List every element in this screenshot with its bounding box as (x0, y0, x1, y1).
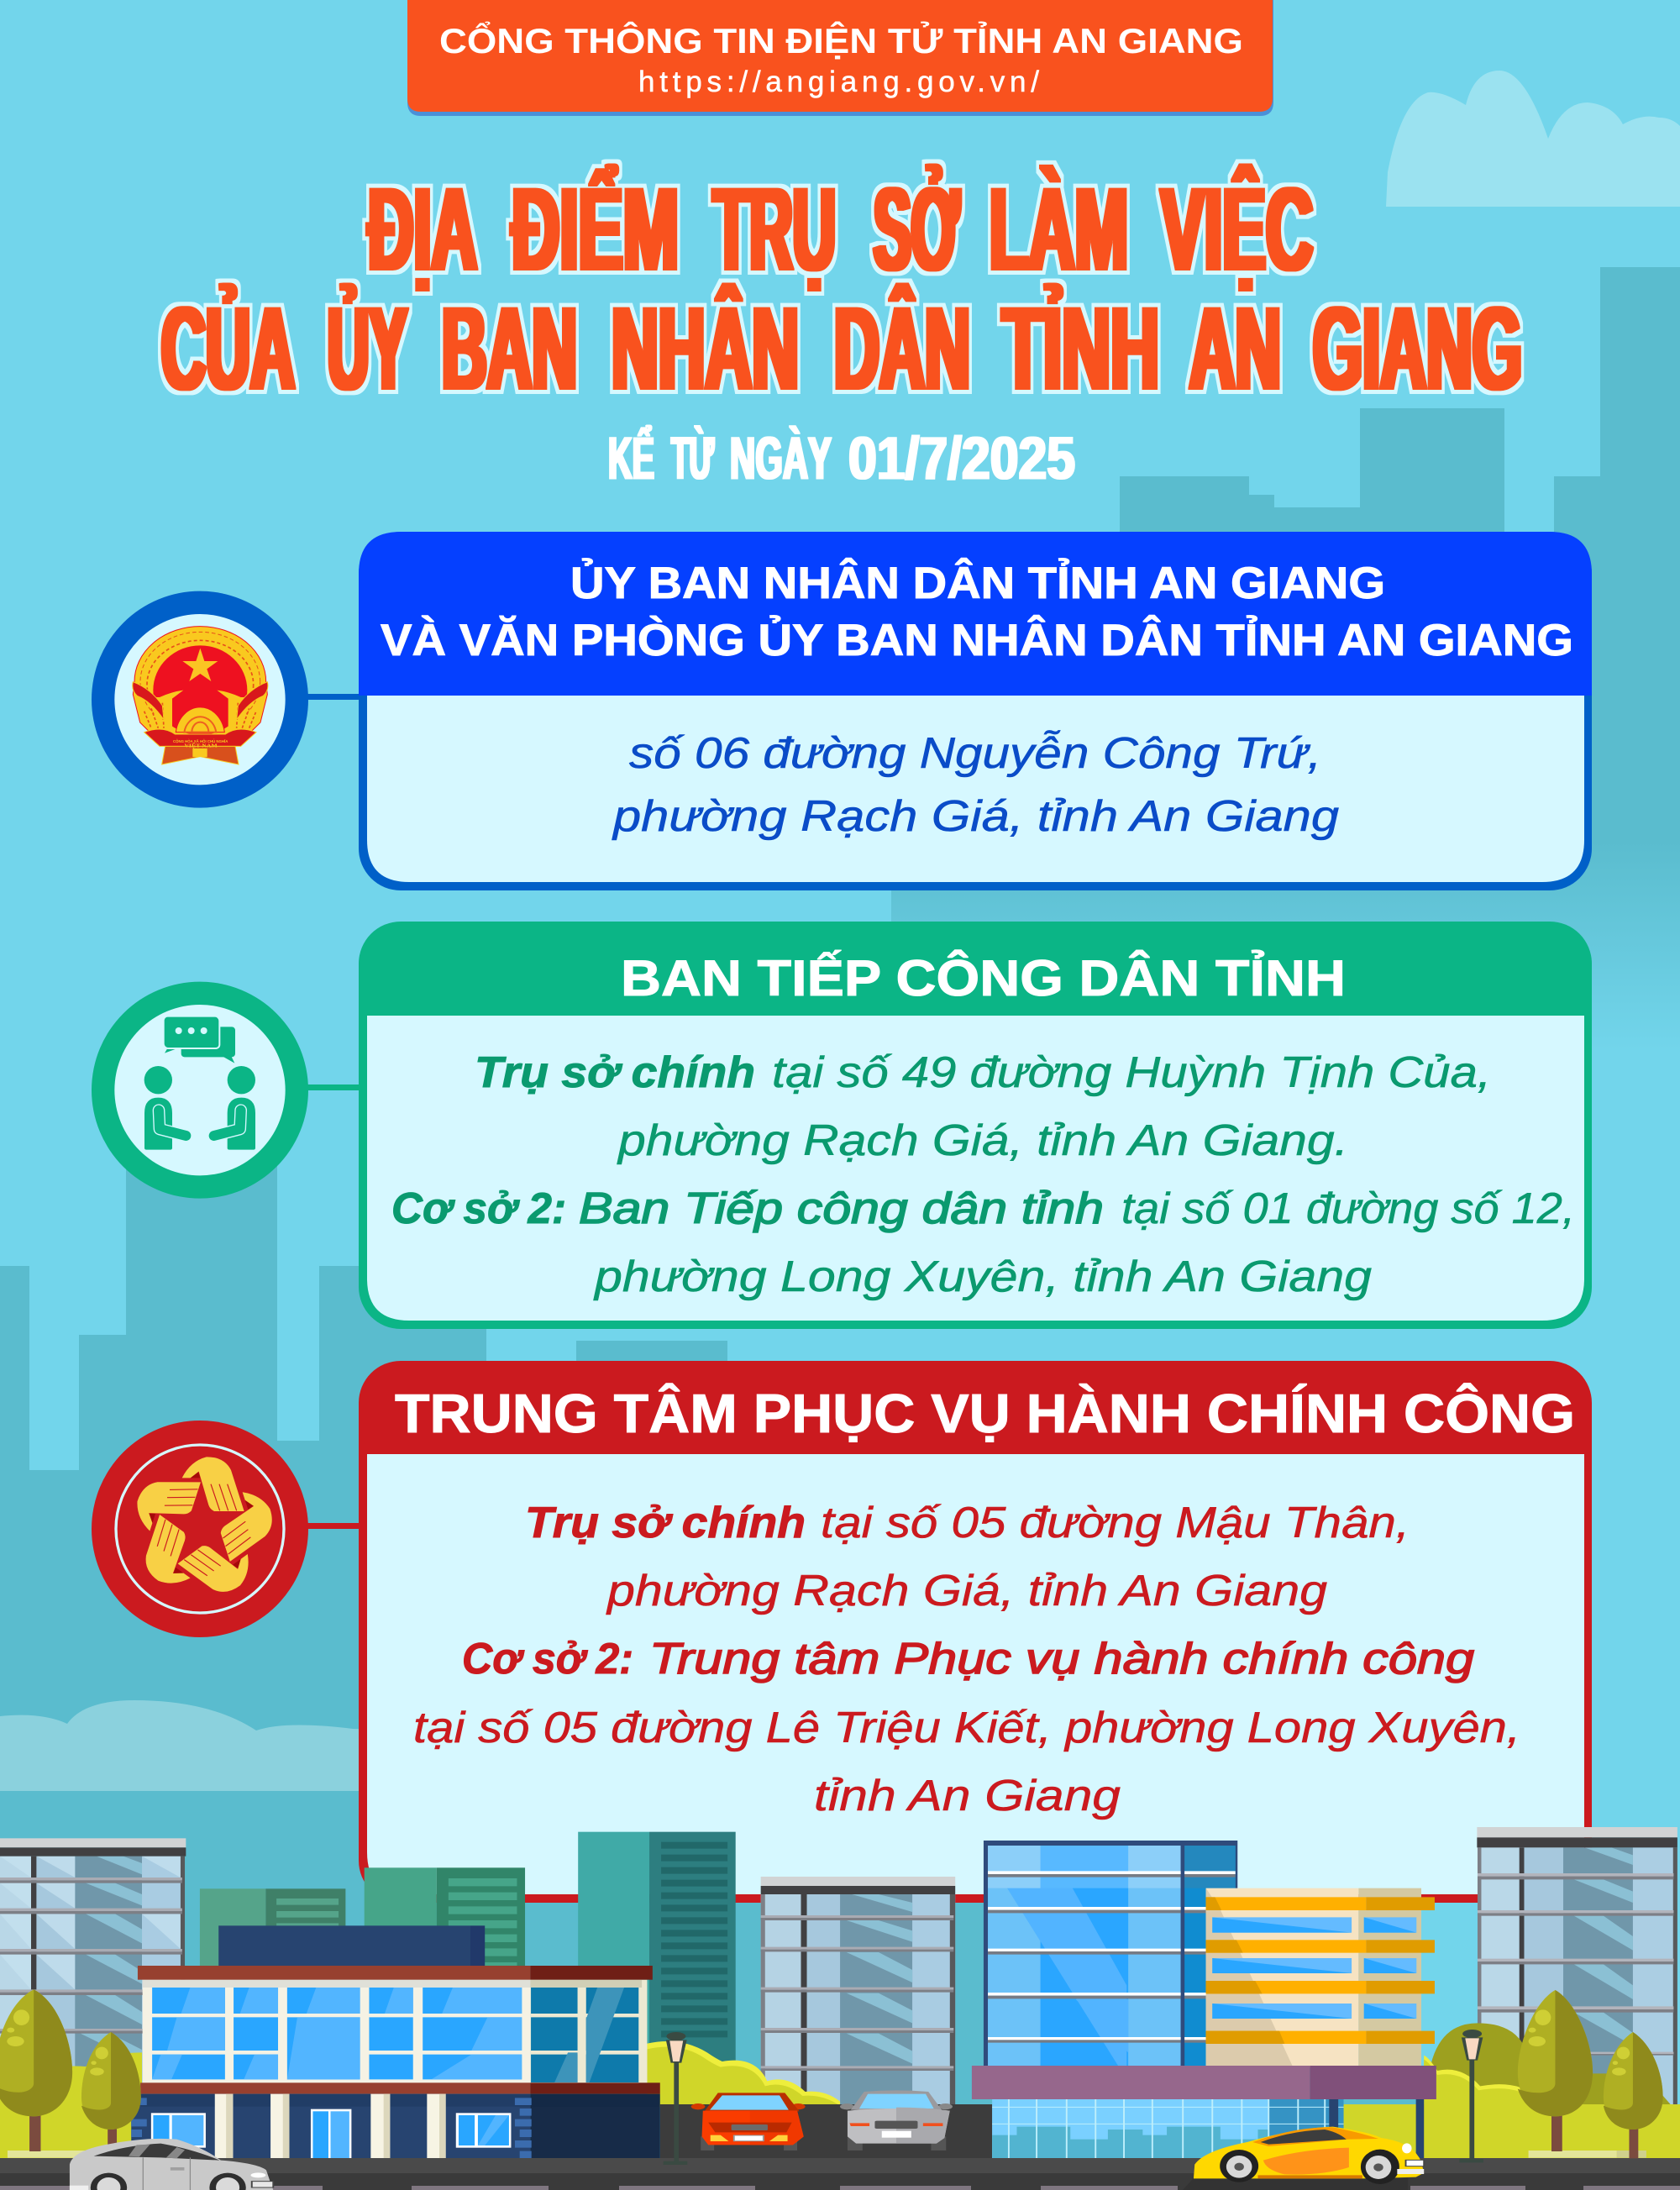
title: VIỆC (1161, 163, 1313, 295)
address: Ban Tiếp công dân: tại số 01 đường số 12, (1121, 1184, 1575, 1233)
address: Ban Tiếp công dân (391, 1048, 1575, 1301)
title: SỞ (874, 163, 959, 295)
trees left (0, 1989, 141, 2158)
building: cream tower with orange bands (1206, 1888, 1435, 2067)
icon: national emblem (92, 591, 308, 808)
address: Trung tâm: Trung tâm Phục vụ hành chính công (649, 1635, 1474, 1683)
emblem red disc (153, 645, 247, 735)
subtitle date: KỂ (608, 425, 654, 492)
address: Ban Tiếp công dân: tại số 49 đường Huỳnh Tịnh Của, (772, 1048, 1491, 1097)
icon: two people talking (92, 982, 308, 1199)
heading: Trung tâm: TRUNG TÂM PHỤC VỤ HÀNH CHÍNH CÔNG (395, 1383, 1575, 1444)
address: Ban Tiếp công dân: Cơ sở 2: (391, 1184, 566, 1233)
title: ỦY (328, 282, 407, 414)
background cloud left (0, 1700, 470, 1791)
address: Trung tâm: tại số 05 đường Lê Triệu Kiết, phường Long Xuyên, (413, 1704, 1520, 1752)
title: DÂN (834, 282, 970, 414)
red car (691, 2093, 806, 2151)
title: TRỤ (713, 163, 836, 295)
title: ĐỊA (368, 163, 477, 295)
icon: five hands star (92, 1421, 308, 1637)
background skyline right (891, 267, 1680, 1092)
address: UBND: phường Rạch Giá, tỉnh An Giang (612, 792, 1339, 841)
icon: national emblem: VIỆT NAM (184, 742, 218, 748)
address: UBND (612, 729, 1339, 841)
emblem lower wreath (151, 691, 249, 733)
building: green towers and teal tower (200, 1832, 736, 2070)
bush right (840, 2023, 1680, 2158)
building: right glass tower (1477, 1827, 1677, 2108)
trees right (1518, 1990, 1663, 2158)
speech bubbles (165, 1017, 235, 1063)
header banner: CỔNG THÔNG TIN ĐIỆN TỬ TỈNH AN GIANG (439, 19, 1243, 60)
emblem gear (176, 707, 224, 733)
city scene (0, 1827, 1680, 2190)
address: Ban Tiếp công dân: Ban Tiếp công dân tỉnh (579, 1184, 1104, 1233)
emblem ribbon and base (144, 729, 256, 746)
title: AN (1189, 282, 1281, 414)
title: BAN (442, 282, 577, 414)
title: ĐIỂM (512, 163, 679, 295)
title: NHÂN (612, 282, 799, 414)
building: glass lobby with purple band (972, 2066, 1436, 2158)
street lamp left (664, 2032, 687, 2165)
street lamp right (1459, 2030, 1483, 2162)
bush left (0, 2052, 142, 2158)
address: Trung tâm (413, 1499, 1520, 1820)
building: main office (131, 1925, 660, 2158)
address: Trung tâm: Cơ sở 2: (462, 1635, 633, 1683)
building: centre glass tower (761, 1877, 955, 2107)
background skyline left (0, 1159, 1421, 2190)
panel: UBND (359, 532, 1592, 890)
emblem wheat ring (133, 627, 267, 737)
person right (214, 1066, 255, 1150)
bush middle (647, 2041, 840, 2158)
address: Trung tâm: phường Rạch Giá, tỉnh An Giang (606, 1567, 1327, 1615)
building: left glass tower (0, 1838, 186, 2088)
address: Trung tâm: tỉnh An Giang (814, 1772, 1121, 1820)
heading: UBND: ỦY BAN NHÂN DÂN TỈNH AN GIANG (570, 557, 1385, 608)
title: TỈNH (1002, 282, 1159, 414)
heading: UBND (381, 557, 1573, 665)
heading: Ban Tiếp công dân: BAN TIẾP CÔNG DÂN TỈNH (621, 950, 1346, 1006)
emblem star (182, 649, 218, 681)
address: UBND: số 06 đường Nguyễn Công Trứ, (629, 729, 1321, 778)
address: Ban Tiếp công dân: phường Long Xuyên, tỉnh An Giang (593, 1253, 1372, 1301)
subtitle date: TỪ (671, 426, 714, 492)
title: LÀM (990, 163, 1128, 295)
header banner: https://angiang.gov.vn/ (638, 66, 1039, 98)
silver car side view (70, 2139, 273, 2190)
panel: Trung tâm Phục vụ hành chính công (359, 1361, 1592, 1903)
connector: card 1 (294, 694, 365, 700)
connector: card 2 (294, 1084, 365, 1090)
silver car rear view (840, 2090, 953, 2151)
subtitle date (608, 425, 1075, 492)
address: Ban Tiếp công dân: phường Rạch Giá, tỉnh An Giang. (617, 1116, 1348, 1165)
address: Ban Tiếp công dân: Trụ sở chính (475, 1048, 755, 1097)
subtitle date: NGÀY (730, 426, 832, 492)
title: CỦA (161, 282, 295, 414)
address: Trung tâm: Trụ sở chính (525, 1499, 806, 1547)
connector: card 3 (294, 1523, 365, 1529)
heading: UBND: VÀ VĂN PHÒNG ỦY BAN NHÂN DÂN TỈNH AN GIANG (381, 614, 1573, 665)
address: Trung tâm: tại số 05 đường Mậu Thân, (821, 1499, 1410, 1547)
road (0, 2158, 1680, 2190)
building: blue glass tower (984, 1841, 1237, 2073)
subtitle date: 01/7/2025 (848, 426, 1075, 492)
title (161, 163, 1522, 414)
background cloud top right (1386, 71, 1680, 207)
header banner (407, 0, 1273, 116)
panel: Ban Tiếp công dân (359, 922, 1592, 1329)
icon: national emblem: CỘNG HÒA XÃ HỘI CHỦ NGHĨA (173, 739, 228, 743)
person left (144, 1066, 186, 1150)
yellow sports car (1183, 2127, 1424, 2190)
